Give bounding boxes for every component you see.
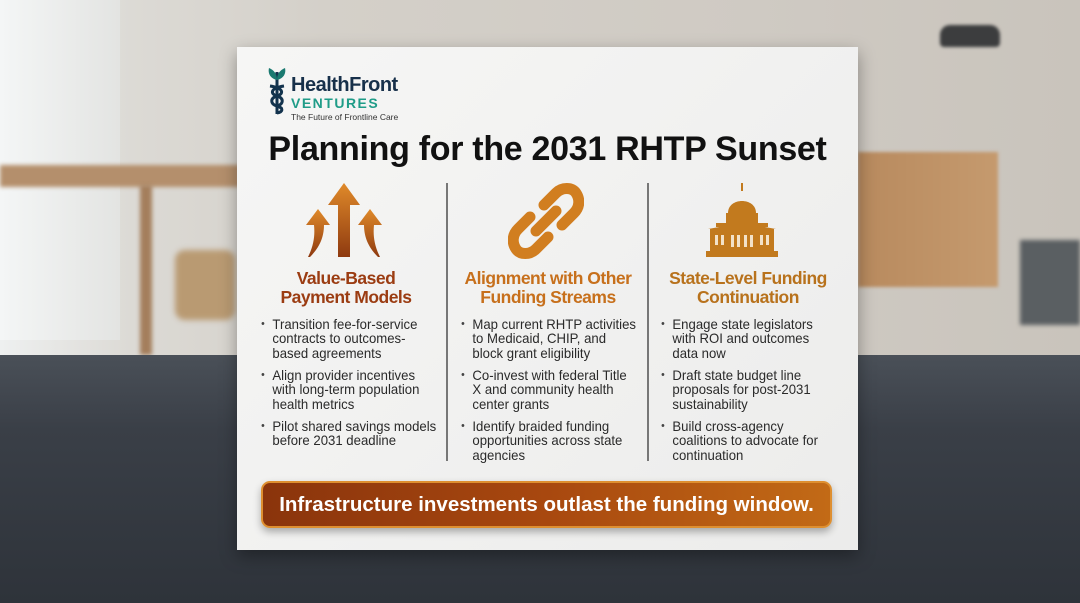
bullets: opportunities across state [472, 432, 622, 448]
bullets: agencies [472, 447, 525, 463]
heading: State-Level Funding [669, 268, 827, 288]
icon: up arrows [306, 183, 382, 257]
logo: VENTURES [291, 95, 379, 111]
bullets: center grants [472, 396, 549, 412]
logo: The Future of Frontline Care [291, 112, 398, 122]
bullets: Engage state legislators [672, 316, 813, 332]
bullets: coalitions to advocate for [672, 432, 818, 448]
bullets: sustainability [672, 396, 748, 412]
bullets: Transition fee-for-service [272, 316, 417, 332]
title: Planning for the 2031 RHTP Sunset [268, 130, 827, 168]
icon: capitol [706, 183, 778, 257]
bullets: X and community health [472, 381, 614, 397]
bullets: Co-invest with federal Title [472, 367, 627, 383]
heading: Payment Models [280, 286, 412, 306]
bullets [262, 316, 436, 448]
banner: Infrastructure investments outlast the funding window. [279, 493, 814, 516]
bullets: health metrics [272, 396, 354, 412]
heading: Continuation [697, 286, 799, 306]
logo: HealthFront [291, 74, 398, 96]
logo [268, 68, 398, 122]
bullets: before 2031 deadline [272, 432, 396, 448]
bullets: contracts to outcomes- [272, 330, 406, 346]
column 2 [462, 183, 636, 463]
dividers [446, 183, 448, 461]
bullets [462, 316, 636, 463]
board [237, 47, 858, 550]
banner [261, 481, 832, 528]
bullets: with long-term population [272, 381, 419, 397]
heading: Funding Streams [480, 286, 616, 306]
heading [280, 268, 412, 306]
heading: Alignment with Other [465, 268, 631, 288]
column 1 [262, 183, 436, 448]
bullets: to Medicaid, CHIP, and [472, 330, 606, 346]
bullets: Identify braided funding [472, 418, 609, 434]
column 3 [662, 183, 827, 463]
icon: caduceus leaf [268, 68, 286, 114]
bullets: based agreements [272, 345, 381, 361]
bullets: Build cross-agency [672, 418, 784, 434]
icon: chain link [508, 183, 584, 259]
bullets: Map current RHTP activities [472, 316, 636, 332]
bullets: continuation [672, 447, 743, 463]
bullets: block grant eligibility [472, 345, 590, 361]
bullets: data now [672, 345, 726, 361]
bullets [662, 316, 818, 463]
heading [465, 268, 632, 306]
bullets: Draft state budget line [672, 367, 801, 383]
bullets: Pilot shared savings models [272, 418, 436, 434]
bullets: proposals for post-2031 [672, 381, 811, 397]
bullets: Align provider incentives [272, 367, 415, 383]
heading [669, 268, 827, 306]
bullets: with ROI and outcomes [672, 330, 809, 346]
heading: Value-Based [297, 268, 395, 288]
